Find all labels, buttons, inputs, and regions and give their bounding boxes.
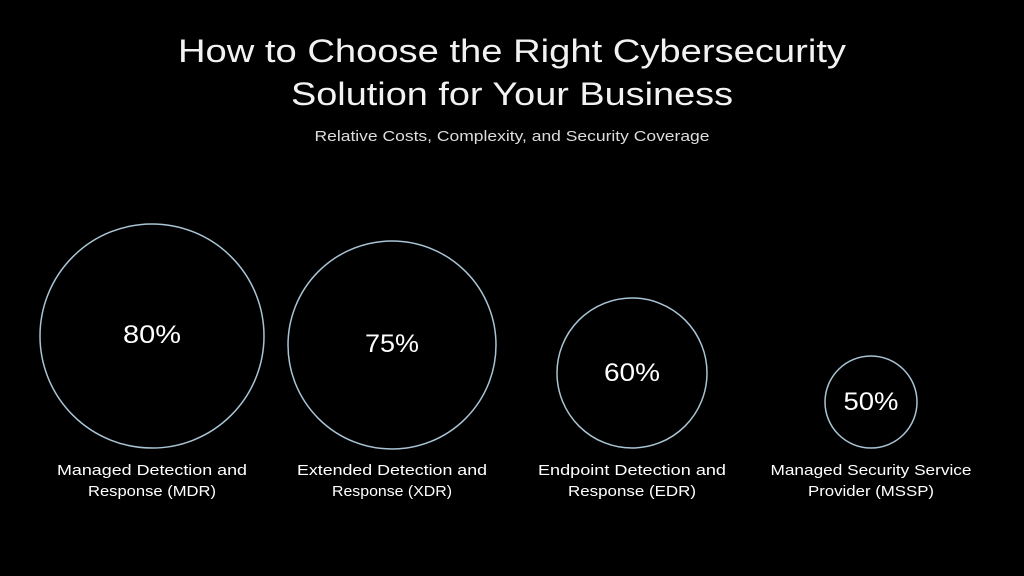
bubble: MSSP	[770, 356, 972, 500]
title: How to Choose the Right Cybersecurity	[178, 33, 846, 69]
bubble: MDR	[40, 224, 264, 500]
bubble: EDR: Response (EDR)	[568, 483, 696, 500]
title: Solution for Your Business	[291, 76, 733, 112]
bubble: MSSP: Managed Security Service	[770, 462, 972, 479]
bubble: MSSP: 50%	[844, 388, 898, 416]
bubble: XDR: 75%	[365, 330, 419, 358]
subtitle: Relative Costs, Complexity, and Security Coverage	[314, 128, 710, 145]
bubble: MSSP: Provider (MSSP)	[808, 483, 934, 500]
bubble: EDR: 60%	[604, 359, 660, 387]
bubble: XDR: Response (XDR)	[332, 483, 452, 500]
bubble: MDR: 80%	[123, 321, 181, 349]
bubble: XDR: Extended Detection and	[297, 462, 487, 479]
bubble: MDR: Managed Detection and	[57, 462, 247, 479]
bubble: EDR	[538, 298, 726, 500]
bubble: XDR	[288, 241, 496, 500]
bubble: MDR: Response (MDR)	[88, 483, 216, 500]
bubble: EDR: Endpoint Detection and	[538, 462, 726, 479]
title	[178, 33, 846, 112]
